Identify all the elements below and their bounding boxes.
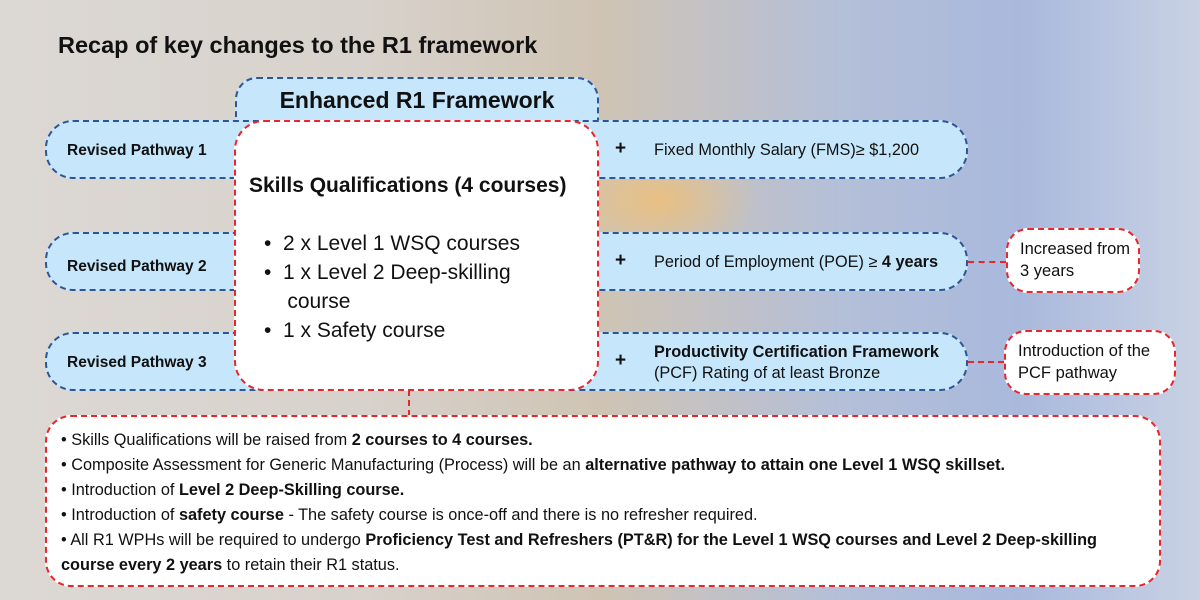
skills heading: Skills Qualifications (4 courses) — [249, 174, 566, 197]
pathway 1 bar — [45, 120, 968, 179]
pathway 3 bar: Revised Pathway 3 — [67, 354, 207, 371]
callout: increased from 3 years: Increased from — [1020, 240, 1130, 258]
pathway 3 bar: Productivity Certification Framework — [654, 343, 939, 361]
pathway 3 bar — [45, 332, 968, 391]
summary box: • All R1 WPHs will be required to undergo Proficiency Test and Refreshers (PT&R) for the Level 1 WSQ courses and Level 2 Deep-skilling — [61, 531, 1097, 549]
summary box: • Skills Qualifications will be raised from 2 courses to 4 courses. — [61, 431, 533, 449]
callout: increased from 3 years: 3 years — [1020, 262, 1074, 280]
skills qualifications box — [234, 120, 599, 391]
pathway 3 bar: + — [615, 350, 626, 371]
connector to callout 1 — [968, 261, 1006, 263]
skills list — [264, 232, 520, 342]
summary box: • Introduction of safety course - The safety course is once-off and there is no refresher required. — [61, 506, 758, 524]
header tab: Enhanced R1 Framework — [235, 77, 599, 127]
pathway 2 bar: Revised Pathway 2 — [67, 258, 207, 275]
summary box: • Introduction of Level 2 Deep-Skilling course. — [61, 481, 404, 499]
summary box — [45, 415, 1161, 587]
callout: introduction of PCF — [1004, 330, 1176, 395]
pathway 2 bar: + — [615, 250, 626, 271]
skills list: • 1 x Level 2 Deep-skilling — [264, 261, 511, 284]
vertical connector — [408, 390, 410, 416]
callout: increased from 3 years — [1006, 228, 1140, 293]
pathway 1 bar: Fixed Monthly Salary (FMS)≥ $1,200 — [654, 141, 919, 159]
background glow — [560, 140, 760, 260]
callout: introduction of PCF: PCF pathway — [1018, 364, 1117, 382]
pathway 1 bar: + — [615, 138, 626, 159]
skills list: • 2 x Level 1 WSQ courses — [264, 232, 520, 255]
title: Recap of key changes to the R1 framework — [58, 32, 537, 58]
pathway 2 bar — [45, 232, 968, 291]
pathway 1 bar: Revised Pathway 1 — [67, 142, 207, 159]
summary box: course every 2 years to retain their R1 status. — [61, 556, 400, 574]
callout: introduction of PCF: Introduction of the — [1018, 342, 1150, 360]
connector to callout 2 — [968, 361, 1004, 363]
pathway 2 bar: Period of Employment (POE) ≥ 4 years — [654, 253, 938, 271]
skills list: • 1 x Safety course — [264, 319, 445, 342]
pathway 3 bar: (PCF) Rating of at least Bronze — [654, 364, 880, 382]
skills list: course — [287, 290, 350, 313]
summary box: • Composite Assessment for Generic Manufacturing (Process) will be an alternative pathway to attain one Level 1 WSQ skillset. — [61, 456, 1005, 474]
header tab: Enhanced R1 Framework: Enhanced R1 Framework — [280, 87, 554, 113]
